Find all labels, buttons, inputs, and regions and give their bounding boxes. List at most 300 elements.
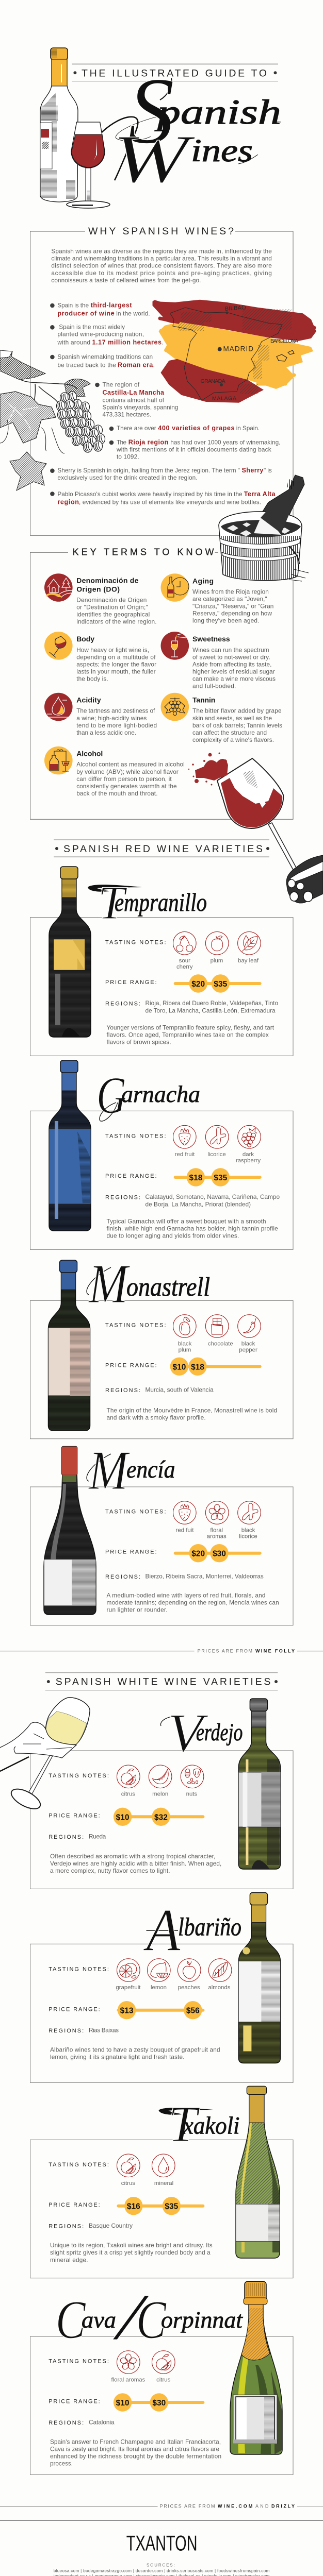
tasting notes: Albarino: grapefruit [116,1985,141,1991]
description: Cava: process. [50,2460,73,2467]
icon: pouring glass [161,632,189,660]
bottle: Txakoli [236,2086,280,2258]
price range: Cava [49,2393,204,2412]
regions: Garnacha [105,1193,280,1208]
icon: house and tree [44,573,73,602]
price range: Tempranillo: $20 [191,980,205,989]
price range: Tempranillo: PRICE RANGE: [105,979,157,986]
tasting notes: Tempranillo: bay leaf [238,958,259,964]
description: Mencia: run lighter or rounder. [106,1606,168,1614]
tasting notes: Verdejo: TASTING NOTES: [49,1773,109,1779]
icon: distillery [44,747,73,774]
price range: Mencia [105,1544,262,1562]
fact: Roman era: . [153,361,155,368]
description: Monastrell: and dark with a smoky flavor profile. [106,1414,206,1421]
header title block [72,64,278,81]
name: Tempranillo: empranillo [115,888,207,917]
tasting notes: Mencia: licorice [239,1534,257,1540]
price range: Tempranillo: $35 [214,980,228,989]
section heading: Spanish red wine varieties [54,840,269,857]
description: Tempranillo [106,1024,274,1045]
description: Garnacha: finish, while high-end Garnacha has bolder, high-tannin profile [106,1225,278,1232]
tasting notes: Cava: citrus [156,2377,171,2383]
description: Verdejo: Verdejo wines are highly acidic with a bitter finish. When aged, [50,1860,221,1867]
source note: Wine.com and Drizly: AND [255,2503,269,2509]
section heading: Spanish red wine varieties: SPANISH RED WINE VARIETIES [63,843,263,855]
description: Albarino: lemon, giving it its signature light and fresh taste. [50,2053,184,2060]
fact: Picasso: Pablo Picasso's cubist works were heavily inspired by his time in the [57,490,243,498]
map of Spain on flag: BILBAO [224,304,247,312]
fact: Rioja region: has had over 1000 years of winemaking, [170,438,281,446]
fact: planted nation [50,324,164,346]
panel: Albarino [30,1893,293,2082]
price range: Txakoli [49,2197,204,2215]
tasting notes: Cava: floral aromas [111,2377,146,2383]
intro paragraph: climate and winemaking traditions in a particular area. This results in a vibrant and [51,255,272,262]
description: Mencia [106,1592,279,1614]
name: Cava / Corpinnat: C [136,2290,167,2350]
source note: Wine Folly: WINE FOLLY [255,1648,295,1653]
term: sweetness: can make a wine more viscous [192,675,276,682]
illustration: bottle and red wine glass [40,48,110,208]
panel: Tempranillo [30,867,293,1056]
intro paragraph: accessible due to its modest price points and pre-aging practices, giving [51,269,272,277]
fact: third-largest producer: producer of wine [57,310,115,317]
illustration: grapes and vine leaves [0,350,105,490]
term: sweetness [161,632,276,689]
regions: Txakoli: REGIONS: [49,2223,84,2229]
bottle: Garnacha [49,1060,91,1231]
term: tannin: Tannin [192,696,215,704]
regions: Monastrell: Murcia, south of Valencia [146,1386,214,1393]
tasting notes: Garnacha: dark [243,1151,254,1158]
price range: Garnacha [105,1168,262,1187]
tasting notes: Mencia: aromas [207,1534,227,1540]
tasting notes: Garnacha: TASTING NOTES: [105,1133,166,1139]
fact: Roman era: be traced back to the [57,361,116,368]
description: Mencia: A medium-bodied wine with layers of red fruit, florals, and [106,1592,265,1599]
description: Verdejo: Often described as aromatic with a strong tropical character, [50,1853,215,1860]
name: Garnacha [96,1066,200,1125]
fact: 400 varieties: 400 varieties of grapes [158,425,234,432]
fact: Roman era [50,353,155,368]
tasting notes: Albarino: almonds [208,1985,231,1991]
price range: Txakoli: PRICE RANGE: [49,2202,100,2208]
fact: planted nation: 1.17 million hectares [92,338,162,346]
title script: Spanish Wines: ines [191,133,253,168]
tasting notes: Tempranillo: cherry [176,964,193,970]
term: body: depending on a multitude of [76,653,156,660]
term: alcohol: Alcohol content as measured in alcohol [76,761,185,768]
panel: Txakoli [30,2086,293,2278]
fact: Picasso: region [57,498,79,505]
heading: why Spanish wines: WHY SPANISH WINES? [88,226,234,237]
term: body: the body is. [76,675,108,682]
fact: Sherry: Sherry [241,467,263,474]
name: Mencia: M [88,1440,130,1501]
tasting notes: Tempranillo: sour [179,958,190,964]
description: Albarino: Albariño wines tend to have a zesty bouquet of grapefruit and [50,2046,220,2053]
regions: Cava: Catalonia [89,2418,115,2426]
price range: Mencia: $20 [191,1550,205,1558]
tasting notes: Mencia: red fuit [176,1528,194,1534]
description: Cava: Cava is zesty and bright. Its floral aromas and citrus flavors are [50,2446,219,2453]
tasting notes: Txakoli: citrus [121,2180,135,2187]
term: alcohol: Alcohol [76,749,103,757]
price range: Cava: $10 [116,2399,130,2408]
fact list [50,302,280,505]
term: sweetness: of sweet to not-sweet or dry. [192,653,270,660]
description: Albarino [50,2046,220,2060]
title script: Spanish Wines [102,58,281,197]
fact: Picasso: Terra Alta [244,490,276,498]
tasting notes: Txakoli: mineral [154,2180,173,2187]
term: denominacion de origen: identifies the geographical [76,611,150,618]
sources [54,2563,269,2576]
name: Monastrell: M [88,1253,130,1315]
tasting notes: Mencia [105,1501,261,1540]
regions: Albarino: REGIONS: [49,2028,84,2034]
fact: Castilla-La Mancha: contains almost half of [102,396,165,403]
term: denominacion de origen: indicators of the wine region. [76,618,157,625]
fact: Castilla-La Mancha: Spain's vineyards, spanning [102,403,178,411]
tasting notes: Albarino: TASTING NOTES: [49,1966,109,1972]
term: aging: Reserva," depending on how [192,609,272,617]
description: Cava: enhanced by the richness brought by the double fermentation [50,2453,221,2460]
fact: Rioja region: The [117,438,126,446]
description: Garnacha [106,1217,278,1239]
regions: Cava [49,2418,115,2426]
fact: Rioja region: with first mentions of it in official documents dating back [116,446,271,453]
title script: Spanish Wines: panish [155,92,281,131]
price range: Verdejo: $32 [154,1813,168,1822]
icon: tilted glass [44,632,73,660]
tasting notes: Verdejo [49,1765,204,1797]
tasting notes: Albarino: lemon [151,1985,167,1991]
fact: Castilla-La Mancha [95,381,178,418]
term: aging: "Crianza," "Reserva," or "Gran [192,602,273,609]
term: tannin: skin and seeds, as well as the [192,715,272,722]
section heading: Spanish white wine varieties: SPANISH WHITE WINE VARIETIES [56,1676,270,1688]
overline: the illustrated guide to: THE ILLUSTRATED GUIDE TO [82,67,267,79]
name: Albarino: lbariño [178,1912,241,1941]
description: Txakoli [50,2242,213,2263]
fact: Sherry: Sherry is Spanish in origin, hailing from the Jerez region. The term " [57,467,240,474]
fact: Sherry: " is [264,467,272,474]
price range: Verdejo: $10 [116,1813,130,1822]
name: Txakoli: T [168,2095,200,2153]
source note: Wine.com and Drizly: PRICES ARE FROM [160,2503,215,2509]
name: Garnacha: arnacha [121,1081,200,1107]
term: aging: Aging [192,577,214,585]
term: acidity: than a less acidic one. [76,729,136,736]
term: acidity [44,693,157,736]
description: Tempranillo: Younger versions of Tempranillo feature spicy, fleshy, and tart [106,1024,274,1031]
term: alcohol [44,747,185,797]
price range: Albarino: $56 [186,2007,200,2015]
fact: third-largest producer [50,302,150,317]
term: body: How heavy or light wine is, [76,646,149,653]
tasting notes: Albarino [49,1959,232,1991]
title script: Spanish Wines: W [112,121,196,197]
term: sweetness: and full-bodied. [192,682,236,689]
price range: Monastrell [105,1358,262,1376]
name: Monastrell: onastrell [126,1273,210,1302]
fact: Picasso [50,490,276,505]
description: Mencia: moderate tannins; depending on the region, Mencía wines can [106,1599,279,1606]
term: tannin: The bitter flavor added by grape [192,707,282,715]
price range: Albarino: PRICE RANGE: [49,2006,100,2012]
tasting notes: Albarino: peaches [178,1985,200,1991]
regions: Albarino [49,2026,119,2034]
description: Monastrell: The origin of the Mourvèdre in France, Monastrell wine is bold [106,1407,277,1414]
name: Albarino: A [143,1896,181,1964]
term: tannin [161,693,282,743]
regions: Mencia: REGIONS: [105,1574,140,1580]
description: Cava [50,2438,221,2467]
term: sweetness: Wines can run the spectrum [192,646,269,653]
name: Txakoli [159,2095,239,2153]
map of Spain on flag: MADRID [223,345,253,353]
fact: Picasso: , evidenced by his use of elements like vineyards and wine bottles. [79,498,261,505]
tasting notes: Monastrell: plum [179,1347,191,1353]
bottle: Mencia [44,1446,96,1615]
description: Tempranillo: flavors of brown spices. [106,1038,171,1045]
term: body: aspects; the longer the flavor [76,660,156,668]
price range: Garnacha: $18 [189,1174,203,1182]
name: Albarino [143,1896,241,1964]
tasting notes: Cava [49,2351,175,2383]
sources: blueosa.com | bodegamaestrazgo.com | decanter.com | drinks.seriouseats.com | foodswinesfromspain.com [54,2568,269,2573]
tasting notes: Garnacha: red fruit [175,1151,195,1158]
fact: planted nation: Spain is the most widely [59,324,125,331]
description: Cava: Spain's answer to French Champagne and Italian Franciacorta, [50,2438,221,2446]
price range: Monastrell: $18 [191,1363,204,1371]
fact: Castilla-La Mancha: 473,331 hectares. [102,411,151,418]
map of Spain on flag: GRANADA [201,378,225,384]
regions: Txakoli: Basque Country [89,2222,133,2229]
regions: Tempranillo: Rioja, Ribera del Duero Roble, Valdepeñas, Tinto [146,999,278,1007]
fact: Rioja region: Rioja region [128,438,168,446]
term: sweetness: higher levels of residual sugar [192,668,275,675]
source note: Wine.com and Drizly: WINE.COM [218,2503,252,2509]
logo: Txanton: TXANTON [126,2531,198,2555]
regions: Cava: REGIONS: [49,2420,84,2426]
price range: Cava: PRICE RANGE: [49,2398,100,2404]
price range: Verdejo [49,1808,204,1826]
price range: Garnacha: PRICE RANGE: [105,1173,157,1179]
description: Txakoli: Unique to its region, Txakoli wines are bright and citrusy. Its [50,2242,213,2249]
tasting notes: Verdejo: melon [152,1791,168,1797]
regions: Verdejo: REGIONS: [49,1834,84,1840]
name: Tempranillo [88,876,207,929]
price range: Verdejo: PRICE RANGE: [49,1813,100,1819]
term: denominacion de origen: Denominación de Origen [76,597,147,604]
description: Verdejo [50,1853,221,1874]
description: Txakoli: slight spritz gives it a crisp yet slightly rounded body and a [50,2249,211,2256]
tasting notes: Txakoli [49,2154,175,2187]
term: sweetness: Aside from affecting its taste, [192,660,271,668]
tasting notes: Monastrell [105,1315,261,1353]
term: body [44,632,156,682]
regions: Albarino: Rias Baixas [89,2026,119,2033]
fact: Sherry: exclusively used for the drink created in the region. [57,474,198,481]
tasting notes: Garnacha: raspberry [236,1158,261,1164]
description: Tempranillo: flavors. Once aged, Tempranillo wines take on the complex [106,1031,269,1038]
regions: Garnacha: REGIONS: [105,1195,140,1201]
price range: Albarino [49,2001,204,2019]
term: aging: Wines from the Rioja region [192,588,269,595]
term: aging [161,573,273,624]
panel: key terms to know [30,547,293,819]
tasting notes: Mencia: TASTING NOTES: [105,1509,166,1515]
panel: Cava / Corpinnat [30,2280,293,2475]
tasting notes: Garnacha: licorice [207,1151,226,1158]
fact: planted nation: planted wine-producing nation, [57,331,144,338]
tasting notes: Txakoli: TASTING NOTES: [49,2162,109,2168]
term: acidity: The tartness and zestiness of [76,707,155,715]
illustration: hand with splashing red wine glass [188,752,323,903]
intro paragraph: distinct selection of wines that produce consistent flavors. They are also more [51,262,272,269]
regions: Garnacha: Calatayud, Somotano, Navarra, Cariñena, Campo [146,1193,280,1200]
heading: key terms: KEY TERMS TO KNOW [73,547,214,557]
term: body: Body [76,635,94,643]
tasting notes: Verdejo: nuts [186,1791,197,1797]
tasting notes: Monastrell: pepper [239,1347,257,1353]
sources: SOURCES: [147,2563,175,2568]
source note: Wine.com and Drizly [0,2503,323,2509]
tasting notes: Tempranillo: TASTING NOTES: [105,940,166,946]
term: aging: long they've been aged. [192,617,259,624]
divider above footer [0,2520,323,2521]
illustration: hand with white wine glass [0,1698,90,1813]
term: acidity: tend to be more light-bodied [76,722,157,729]
price range: Cava: $30 [152,2399,166,2408]
tasting notes: Monastrell: chocolate [208,1341,233,1347]
tasting notes: Verdejo: citrus [121,1791,135,1797]
fact: Sherry [50,467,272,481]
term: tannin: can affect the structure and [192,729,267,736]
name: Monastrell [87,1253,210,1315]
name: Txakoli: xakoli [183,2112,239,2140]
source note: Wine.com and Drizly: DRIZLY [271,2503,295,2509]
bottle: Tempranillo [49,867,91,1037]
term: denominacion de origen [44,573,157,625]
intro paragraph: connoisseurs a taste of cellared wines from the get-go. [51,277,201,284]
tasting notes: Tempranillo [105,931,261,970]
icon: drop [44,693,73,721]
term: denominacion de origen: Denominación de [76,577,139,585]
fact: 400 varieties: in Spain. [236,425,260,432]
source note: Wine Folly [0,1648,323,1653]
term: tannin: complexity of a wine's flavors. [192,736,274,743]
fact: Roman era: Roman era [118,361,153,368]
tasting notes: Monastrell: black [241,1341,255,1347]
section heading: Spanish white wine varieties [45,1673,278,1690]
description: Monastrell [106,1407,277,1421]
term: alcohol: can differ from person to person, it [76,775,172,783]
description: Garnacha: due to longer aging and yields from older vines. [106,1232,239,1239]
bottle: Cava [230,2281,282,2454]
regions: Txakoli [49,2222,133,2229]
panel: Verdejo [0,1698,293,1889]
map of Spain on flag [153,300,316,403]
term: alcohol: consistently generates warmth at the [76,783,177,790]
name: Verdejo [160,1703,243,1763]
fact: third-largest producer: in the world. [116,310,150,317]
price range: Albarino: $13 [120,2007,134,2015]
description: Garnacha: Typical Garnacha will offer a sweet bouquet with a smooth [106,1217,266,1225]
term: denominacion de origen: or "Destination of Origin;" [76,604,148,611]
fact: planted nation: with around [57,338,90,346]
map of Spain on flag: MALAGA [212,396,236,402]
regions: Mencia: Bierzo, Ribeira Sacra, Monterrei, Valdeorras [146,1573,264,1580]
tasting notes: Garnacha [105,1125,261,1164]
panel: Mencia [30,1440,293,1625]
name: Garnacha: G [96,1066,126,1125]
source note: Wine Folly: PRICES ARE FROM [198,1648,252,1653]
map of Spain on flag: BARCELONA [270,338,298,344]
fact: Rioja region: to 1092. [117,453,139,460]
term: alcohol: back of the mouth and throat. [76,790,158,797]
name: Cava / Corpinnat: ava [82,2307,116,2333]
panel: Monastrell [30,1253,293,1439]
price range: Tempranillo [105,974,262,993]
name: Mencia [87,1440,175,1501]
regions: Verdejo: Rueda [89,1833,106,1840]
title script: Spanish Wines: S [128,58,174,164]
term: acidity: Acidity [76,696,101,704]
price range: Monastrell: PRICE RANGE: [105,1363,157,1369]
price range: Mencia: PRICE RANGE: [105,1549,157,1555]
regions: Garnacha: de Borja, La Mancha, Priorat (blended) [146,1200,251,1208]
term: aging: are categorized as "Joven," [192,595,267,602]
regions: Verdejo [49,1833,106,1840]
term: body: lasts in your mouth, the fuller [76,668,156,675]
price range: Mencia: $30 [213,1550,226,1558]
description: Txakoli: mineral edge. [50,2256,88,2263]
name: Tempranillo: T [98,876,127,929]
fact: Castilla-La Mancha: Castilla-La Mancha [102,389,165,396]
regions: Tempranillo: de Toro, La Mancha, Castilla-León, Extremadura [146,1007,276,1014]
price range: Txakoli: $16 [127,2202,140,2211]
regions: Monastrell [105,1386,214,1394]
panel: Garnacha [30,1060,293,1249]
term: denominacion de origen: Origen (DO) [76,585,120,594]
price range: Monastrell: $10 [172,1363,186,1371]
name: Mencia: encía [126,1456,175,1483]
name: Verdejo: V [168,1703,208,1763]
name: Cava / Corpinnat: / [112,2280,150,2353]
name: Cava / Corpinnat: orpinnat [161,2307,243,2333]
term: acidity: a wine; high-acidity wines [76,715,147,722]
regions: Monastrell: REGIONS: [105,1387,140,1394]
tasting notes: Monastrell: TASTING NOTES: [105,1323,166,1329]
fact: third-largest producer: Spain is the [57,302,89,309]
fact: 400 varieties [109,425,260,432]
bottle: Albarino [238,1893,280,2063]
panel: why Spanish wines [30,226,293,535]
fact: planted nation: . [162,338,164,346]
price range: Garnacha: $35 [214,1174,228,1182]
term: sweetness: Sweetness [192,635,230,643]
tasting notes: Cava: TASTING NOTES: [49,2359,109,2365]
bottle: Monastrell [49,1260,90,1431]
icon: grape bunch [161,693,189,721]
fact: third-largest producer: third-largest [91,302,132,309]
fact: Castilla-La Mancha: The region of [102,381,140,388]
name: Cava / Corpinnat: C [56,2290,86,2350]
